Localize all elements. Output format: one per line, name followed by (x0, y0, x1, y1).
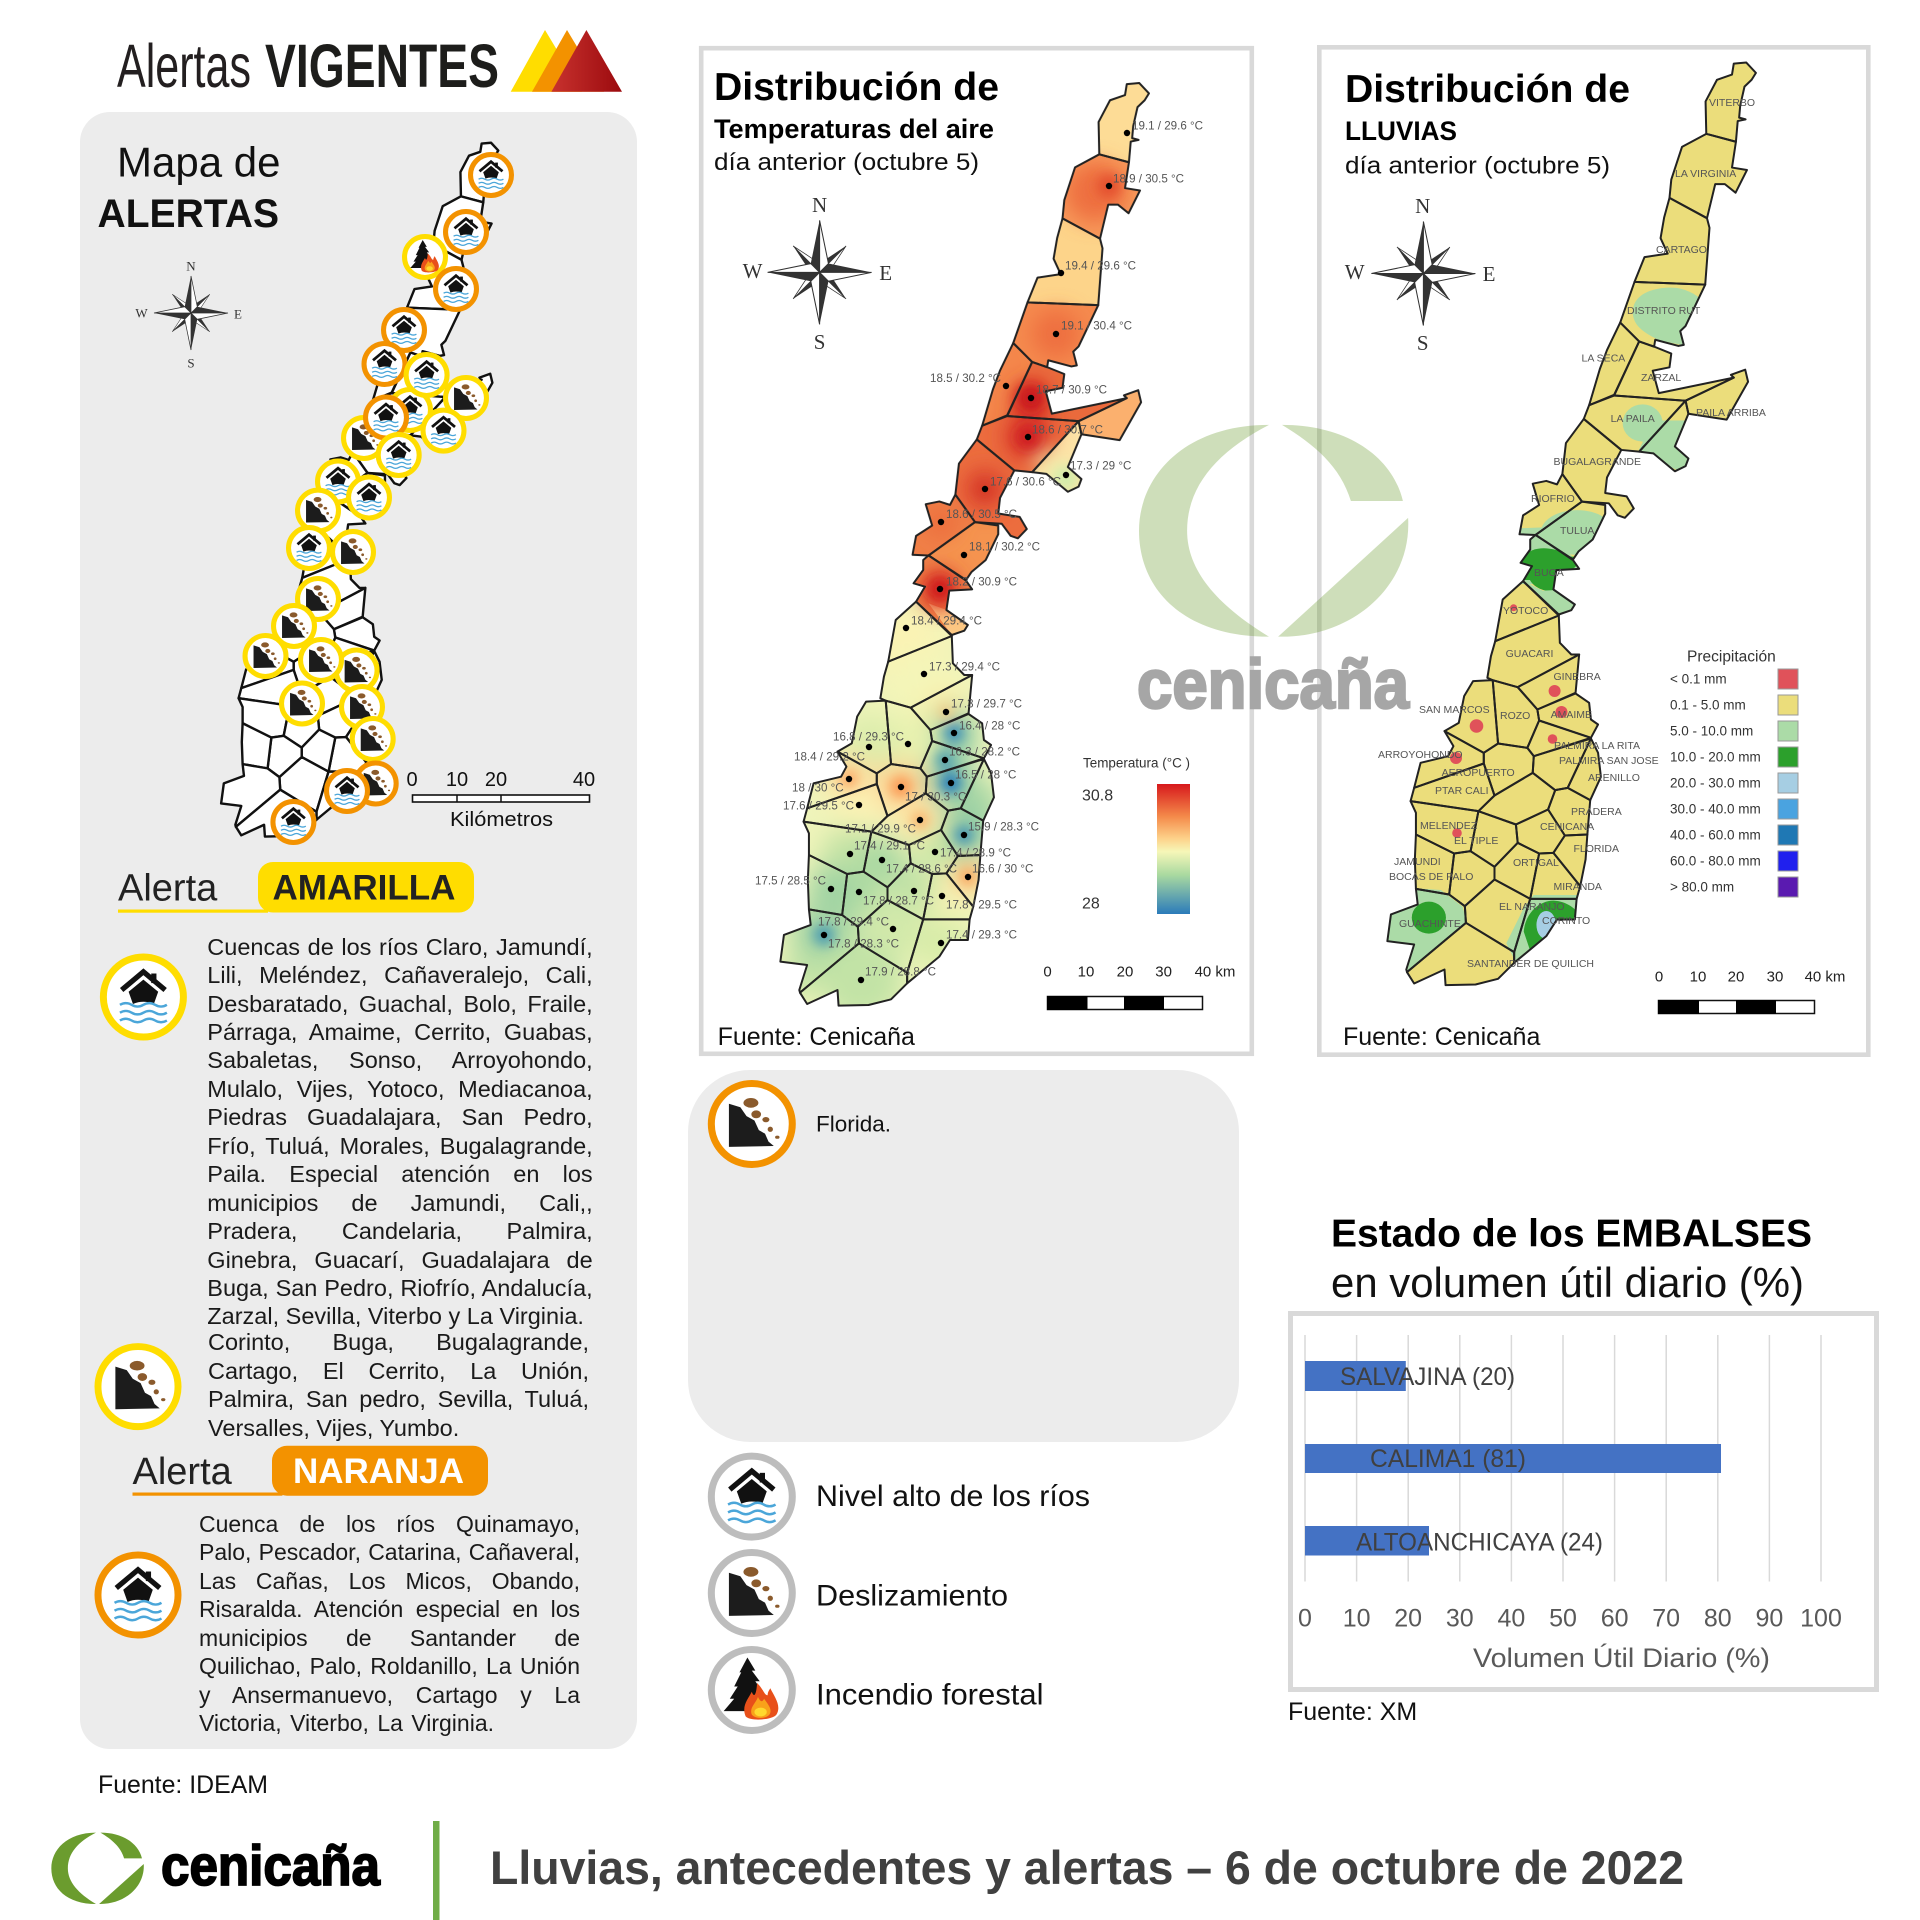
rainfall station labels: ARROYOHONDO (1378, 749, 1463, 761)
legend: temperature color ramp: 28 (1082, 896, 1100, 912)
temperature stations (821, 130, 1130, 983)
icon: compass rose, alert map (135, 258, 242, 370)
source: Cenicaña temperature: Fuente: Cenicaña (718, 1023, 915, 1051)
text: yellow alert river basins: Sabaletas, Sonso, Arroyohondo, (207, 1047, 593, 1073)
marker: landslide (245, 636, 286, 676)
x axis labels: 70 (1652, 1604, 1680, 1632)
icon: compass rose, rainfall map: N (1415, 194, 1430, 218)
x axis labels: 40 (1497, 1604, 1525, 1632)
map: temperature region outlines (780, 83, 1149, 1006)
text: orange alert basins: Palo, Pescador, Catarina, Cañaveral, (199, 1539, 580, 1565)
heading: rainfall distribution: LLUVIAS (1345, 116, 1457, 146)
temperature station labels: 18.2 / 30.9 °C (946, 576, 1017, 588)
scale bar: kilometers: 0 (406, 769, 418, 791)
map: rainfall region outlines (1387, 63, 1756, 985)
text: yellow alert landslide municipalities: Corinto, Buga, Bugalagrande, (208, 1329, 589, 1355)
heading: Mapa de ALERTAS: ALERTAS (98, 192, 279, 236)
temperature station labels: 17.3 / 29.7 °C (951, 698, 1022, 710)
text: yellow alert river basins: Pradera, Candelaria, Palmira, (207, 1218, 593, 1244)
temperature station labels: 18.1 / 30.2 °C (969, 540, 1040, 554)
footer title: Lluvias, antecedentes y alertas – 6 de octubre de 2022 (490, 1841, 1684, 1894)
rainfall station labels: ARENILLO (1588, 772, 1640, 784)
text: yellow alert river basins: Piedras Guadalajara, San Pedro, (207, 1104, 593, 1130)
legend: precipitation (1670, 648, 1798, 897)
marker: flood (327, 771, 367, 811)
text: yellow alert river basins (207, 934, 593, 1329)
temperature station labels: 18.4 / 29.2 °C (794, 750, 865, 764)
alert markers on map (245, 155, 511, 842)
temperature station labels: 17.8 / 29.4 °C (818, 916, 889, 928)
legend: forest fire (711, 1650, 1044, 1730)
legend: precipitation: 60.0 - 80.0 mm (1670, 854, 1761, 868)
temperature station labels: 16.8 / 29.3 °C (833, 730, 904, 744)
heading: rainfall distribution: Distribución de (1345, 68, 1630, 111)
temperature station labels: 17.6 / 29.5 °C (783, 800, 854, 812)
marker: landslide (344, 418, 384, 458)
panel: Florida landslide box (688, 1070, 1239, 1442)
temperature station labels: 17.9 / 28.8 °C (865, 966, 936, 978)
bar labels (1340, 1363, 1603, 1557)
marker: landslide (352, 719, 393, 759)
temperature station labels: 17.8 / 28.7 °C (863, 894, 934, 908)
icon: flood orange (98, 1555, 178, 1635)
scale bar: kilometers: 10 (446, 769, 468, 791)
text: orange alert basins: y Ansermanuevo, Cartago y La (199, 1682, 580, 1708)
heading: Mapa de ALERTAS (98, 138, 280, 236)
bar labels: SALVAJINA (20) (1340, 1363, 1515, 1391)
bar: Calima (1305, 1444, 1721, 1473)
temperature station labels: 17.5 / 28.5 °C (755, 874, 826, 888)
heading: reservoirs: Estado de los EMBALSES (1331, 1212, 1812, 1256)
bar: Altoanchicaya (1305, 1526, 1429, 1556)
bar labels: ALTOANCHICAYA (24) (1356, 1529, 1603, 1557)
scale bar: kilometers (406, 769, 595, 831)
rainfall station labels: YOTOCO (1503, 605, 1548, 617)
rainfall station labels: SAN MARCOS (1419, 704, 1490, 716)
marker: landslide (446, 378, 486, 418)
marker: flood (349, 477, 389, 518)
text: orange alert basins: Cuenca de los ríos Quinamayo, (199, 1511, 580, 1537)
marker: forest fire (405, 237, 445, 277)
rainfall station labels: DISTRITO RUT (1627, 305, 1701, 317)
marker: landslide (274, 606, 314, 646)
icon: compass rose, rainfall map (1345, 194, 1495, 355)
temperature station labels: 18.5 / 30.2 °C (930, 372, 1001, 385)
rainfall station labels: LA SECA (1582, 352, 1625, 364)
legend: flood: Nivel alto de los ríos (816, 1480, 1090, 1513)
heading: Alerta NARANJA (132, 1446, 488, 1496)
x axis labels: 90 (1755, 1604, 1783, 1632)
footer divider (433, 1821, 440, 1920)
rainfall station labels: CARTAGO (1656, 244, 1707, 256)
text: orange alert basins: municipios de Santander de (199, 1625, 580, 1651)
legend: precipitation: Precipitación (1687, 648, 1776, 666)
title: Alertas VIGENTES: Alertas (117, 32, 251, 100)
marker: landslide (333, 532, 373, 572)
map: rainfall surface (1388, 64, 1755, 984)
text: yellow alert river basins: Párraga, Amaime, Cerrito, Guabas, (207, 1019, 593, 1045)
title: Alertas VIGENTES: VIGENTES (265, 32, 499, 100)
scale bar: temperature map: 20 (1117, 964, 1133, 980)
heading: Mapa de ALERTAS: Mapa de (117, 138, 280, 186)
temperature station labels: 18.7 / 30.9 °C (1036, 384, 1107, 396)
scale bar: rainfall map: 0 (1655, 968, 1663, 986)
legend: precipitation: 0.1 - 5.0 mm (1670, 698, 1746, 712)
temperature station labels: 17.3 / 29 °C (1070, 460, 1131, 472)
rainfall station labels: BOCAS DE PALO (1389, 871, 1473, 883)
x axis labels: 80 (1704, 1604, 1732, 1632)
legend: landslide (711, 1553, 1008, 1633)
marker: flood (423, 410, 464, 451)
x axis labels (1298, 1604, 1842, 1632)
heading: Alerta AMARILLA: AMARILLA (272, 868, 456, 908)
scale bar: temperature map: 30 (1155, 964, 1172, 980)
temperature station labels: 17.8 / 28.3 °C (828, 938, 899, 950)
legend: temperature color ramp (1082, 756, 1190, 914)
temperature station labels: 17.4 / 29.3 °C (946, 928, 1017, 942)
scale bar: rainfall map: 30 (1767, 968, 1783, 986)
icon: compass rose, rainfall map: W (1345, 260, 1365, 284)
legend: precipitation: < 0.1 mm (1670, 672, 1727, 686)
text: yellow alert river basins: Buga, San Pedro, Riofrío, Andalucía, (207, 1275, 593, 1301)
legend: precipitation: 20.0 - 30.0 mm (1670, 776, 1761, 790)
marker: flood (318, 461, 358, 502)
footer logo: Cenicaña: cenicaña (161, 1834, 381, 1898)
text: yellow alert river basins: Ginebra, Guacarí, Guadalajara de (207, 1246, 593, 1272)
marker: flood (436, 269, 476, 309)
x axis labels: 20 (1394, 1604, 1422, 1632)
rainfall station labels: CENICANA (1540, 821, 1594, 833)
text: yellow alert river basins: Zarzal, Sevilla, Viterbo y La Virginia. (207, 1303, 584, 1329)
scale bar: temperature map (1043, 964, 1235, 1010)
icon: flood yellow (103, 957, 183, 1037)
text: yellow alert river basins: municipios de Jamundi, Cali,, (207, 1190, 593, 1216)
text: yellow alert landslide municipalities: Palmira, San pedro, Sevilla, Tuluá, (208, 1386, 589, 1412)
x axis labels: 60 (1601, 1604, 1629, 1632)
heading: Alerta AMARILLA: Alerta (118, 868, 218, 910)
rainfall station labels: PALMIRA LA RITA (1554, 740, 1640, 752)
temperature station labels: 18.9 / 30.5 °C (1113, 172, 1184, 186)
temperature station labels: 16.6 / 30 °C (972, 862, 1033, 876)
legend: precipitation: > 80.0 mm (1670, 880, 1734, 894)
scale bar: rainfall map: 20 (1728, 968, 1744, 986)
rainfall station labels: PTAR CALI (1435, 785, 1488, 797)
rainfall station labels: SANTANDER DE QUILICH (1467, 958, 1594, 970)
text: Florida: Florida. (816, 1112, 891, 1136)
scale bar: rainfall map: 10 (1690, 968, 1706, 986)
x axis labels: 10 (1343, 1604, 1371, 1632)
legend: precipitation: 5.0 - 10.0 mm (1670, 724, 1753, 738)
heading: reservoirs: en volumen útil diario (%) (1331, 1259, 1804, 1306)
x axis title: Volumen Útil Diario (%) (1473, 1642, 1770, 1673)
scale bar: kilometers: 40 (573, 769, 595, 791)
icon: compass rose, alert map: W (135, 306, 148, 320)
footer logo: Cenicaña (51, 1833, 381, 1904)
text: yellow alert river basins: Paila. Especial atención en los (207, 1161, 593, 1187)
text: orange alert basins: Quilichao, Palo, Roldanillo, La Unión (199, 1653, 580, 1679)
legend: temperature color ramp: 30.8 (1082, 788, 1113, 804)
rainfall station labels: VITERBO (1709, 97, 1755, 109)
temperature station labels: 15.9 / 28.3 °C (968, 820, 1039, 834)
panel: rainfall map frame (1319, 47, 1868, 1055)
text: yellow alert landslide municipalities: Cartago, El Cerrito, La Unión, (208, 1358, 589, 1384)
temperature station labels: 18.6 / 30.5 °C (946, 508, 1017, 521)
marker: flood (289, 528, 329, 568)
legend: forest fire: Incendio forestal (816, 1678, 1044, 1712)
rainfall station labels: GUACHINTE (1399, 918, 1461, 930)
chart: reservoir useful volume (1290, 1314, 1876, 1690)
icon: compass rose, alert map: N (186, 258, 196, 274)
bar labels: CALIMA1 (81) (1370, 1445, 1526, 1473)
text: yellow alert river basins: Mulalo, Vijes, Yotoco, Mediacanoa, (207, 1076, 593, 1102)
source: Cenicaña rainfall: Fuente: Cenicaña (1343, 1023, 1540, 1051)
rainfall station labels: GUACARI (1506, 648, 1553, 660)
temperature station labels: 17 / 30.3 °C (905, 790, 966, 804)
icon: compass rose, alert map: E (234, 306, 242, 322)
heading: rainfall distribution: día anterior (octubre 5) (1345, 152, 1610, 180)
heading: temperature distribution: Distribución de (714, 66, 999, 109)
temperature station labels: 16.3 / 28.2 °C (949, 746, 1020, 758)
marker: landslide (355, 763, 396, 804)
scale bar: kilometers: 20 (485, 769, 507, 791)
rainfall station labels (1378, 97, 1766, 970)
map: alert regions (221, 143, 498, 837)
text: orange alert basins: Victoria, Viterbo, La Virginia. (199, 1710, 494, 1736)
marker: flood (378, 435, 419, 475)
x axis labels: 50 (1549, 1604, 1577, 1632)
rainfall station labels: LA PAILA (1611, 413, 1655, 425)
temperature station labels: 17.4 / 28.9 °C (940, 846, 1011, 860)
scale bar: temperature map: 40 km (1195, 964, 1235, 980)
temperature station labels: 17.3 / 29.4 °C (929, 660, 1000, 674)
panel: alert map and lists (80, 112, 637, 1749)
rainfall station labels: RIOFRIO (1531, 493, 1575, 505)
marker: flood (446, 212, 486, 252)
text: yellow alert river basins: Desbaratado, Guachal, Bolo, Fraile, (207, 991, 593, 1017)
rainfall station labels: TULUA (1560, 525, 1594, 537)
rainfall station labels: PALMIRA SAN JOSE (1559, 755, 1659, 767)
rainfall station labels: BUGA (1534, 567, 1564, 579)
rainfall station labels: LA VIRGINIA (1675, 168, 1736, 180)
temperature station labels: 19.1 / 30.4 °C (1061, 320, 1132, 332)
text: yellow alert river basins: Lili, Meléndez, Cañaveralejo, Cali, (207, 962, 593, 988)
watermark: Cenicaña logo: cenicaña (1137, 645, 1410, 723)
legend: precipitation: 10.0 - 20.0 mm (1670, 750, 1761, 764)
rainfall station labels: EL NARANJO (1499, 901, 1565, 913)
icon: compass rose, temperature map: W (743, 259, 763, 283)
marker: flood (364, 344, 405, 384)
temperature station labels: 17.4 / 28.6 °C (886, 862, 957, 876)
rainfall station labels: FLORIDA (1574, 843, 1619, 855)
x axis labels: 30 (1446, 1604, 1474, 1632)
map: temperature heat surface (782, 84, 1148, 1005)
heading: temperature distribution: día anterior (octubre 5) (714, 149, 979, 176)
marker: landslide (336, 650, 377, 691)
icon: compass rose, rainfall map: E (1483, 262, 1495, 286)
x axis labels: 100 (1800, 1604, 1842, 1632)
panel: temperature map frame (701, 48, 1252, 1054)
rainfall station labels: PRADERA (1571, 806, 1622, 818)
text: yellow alert river basins: Frío, Tuluá, Morales, Bugalagrande, (207, 1133, 593, 1159)
scale bar: rainfall map (1655, 968, 1845, 1014)
rainfall station labels: GINEBRA (1554, 671, 1601, 683)
source: XM: Fuente: XM (1288, 1698, 1417, 1726)
legend: temperature color ramp: Temperatura (°C ) (1083, 756, 1190, 770)
temperature station labels: 19.4 / 29.6 °C (1065, 260, 1136, 272)
scale bar: temperature map: 0 (1043, 964, 1052, 980)
heading: Alerta AMARILLA (118, 862, 474, 913)
rainfall station labels: JAMUNDI (1394, 856, 1441, 868)
icon: landslide orange (711, 1084, 792, 1164)
marker: landslide (282, 683, 322, 724)
rainfall station labels: PAILA ARRIBA (1696, 407, 1766, 419)
watermark: Cenicaña logo (1137, 425, 1410, 723)
text: yellow alert landslide municipalities (208, 1329, 589, 1441)
marker: landslide (298, 579, 338, 619)
legend: precipitation: 40.0 - 60.0 mm (1670, 828, 1761, 842)
text: yellow alert landslide municipalities: Versalles, Vijes, Yumbo. (208, 1415, 459, 1441)
icon: compass rose, alert map: S (187, 356, 195, 370)
marker: flood (384, 310, 424, 350)
marker: flood (390, 390, 430, 430)
icon: compass rose, temperature map: S (814, 330, 825, 354)
temperature station labels: 18.4 / 29.4 °C (911, 614, 982, 628)
icon: landslide yellow (98, 1347, 178, 1427)
heading: temperature distribution: Temperaturas del aire (714, 114, 994, 144)
marker: landslide (301, 640, 341, 680)
heading: reservoirs (1331, 1212, 1812, 1306)
legend: flood (711, 1456, 1090, 1537)
marker: flood (273, 802, 314, 842)
temperature station labels: 16.5 / 28 °C (955, 768, 1016, 782)
temperature station labels: 18.6 / 30.7 °C (1032, 424, 1103, 436)
scale bar: kilometers: Kilómetros (450, 809, 553, 831)
bar: Salvajina (1305, 1361, 1406, 1391)
marker: flood (406, 355, 447, 395)
icon: compass rose, temperature map (743, 193, 892, 354)
marker: Viterbo flood (471, 155, 511, 195)
text: orange alert basins (199, 1511, 580, 1736)
scale bar: temperature map: 10 (1078, 964, 1094, 980)
rainfall station labels: BUGALAGRANDE (1554, 456, 1641, 468)
temperature station labels: 19.1 / 29.6 °C (1132, 120, 1203, 132)
temperature station labels: 17.1 / 29.9 °C (845, 822, 916, 836)
rainfall station labels: EL TIPLE (1454, 835, 1498, 847)
text: orange alert basins: Las Cañas, Los Micos, Obando, (199, 1568, 580, 1594)
temperature station labels: 17.6 / 30.6 °C (990, 476, 1061, 488)
rainfall station labels: AEROPUERTO (1442, 767, 1515, 779)
source: IDEAM: Fuente: IDEAM (98, 1771, 268, 1799)
heading: rainfall distribution (1345, 68, 1630, 180)
heading: Alerta NARANJA: NARANJA (293, 1452, 464, 1491)
temperature station labels: 17.8 / 29.5 °C (946, 898, 1017, 912)
icon: compass rose, temperature map: N (812, 193, 827, 217)
temperature station labels: 17.4 / 29.1 °C (854, 840, 925, 852)
legend: precipitation: 30.0 - 40.0 mm (1670, 802, 1761, 816)
rainfall station labels: MELENDEZ (1420, 820, 1478, 832)
icon: compass rose, temperature map: E (879, 261, 892, 285)
x axis labels: 0 (1298, 1604, 1312, 1632)
marker: landslide (298, 490, 338, 531)
text: orange alert basins: Risaralda. Atención especial en los (199, 1596, 580, 1622)
title: Alertas VIGENTES (117, 32, 499, 100)
rainfall station labels: ORTIGAL (1513, 857, 1559, 869)
scale bar: rainfall map: 40 km (1805, 968, 1845, 986)
heading: Alerta NARANJA: Alerta (132, 1451, 233, 1493)
rainfall station labels: CORINTO (1542, 915, 1590, 927)
icon: compass rose, rainfall map: S (1417, 331, 1429, 355)
rainfall station labels: AMAIME (1551, 709, 1592, 721)
legend: landslide: Deslizamiento (816, 1580, 1008, 1612)
icon: alert triangles (511, 30, 622, 92)
temperature station labels (755, 120, 1203, 978)
text: yellow alert river basins: Cuencas de los ríos Claro, Jamundí, (207, 934, 593, 960)
marker: landslide (342, 687, 382, 727)
heading: temperature distribution (714, 66, 999, 176)
temperature station labels: 16.4 / 28 °C (959, 720, 1020, 732)
rainfall station labels: ROZO (1500, 710, 1530, 722)
rainfall station labels: MIRANDA (1554, 881, 1602, 893)
rainfall station labels: ZARZAL (1641, 372, 1681, 384)
marker: flood (366, 397, 406, 438)
temperature station labels: 18 / 30 °C (792, 782, 844, 794)
